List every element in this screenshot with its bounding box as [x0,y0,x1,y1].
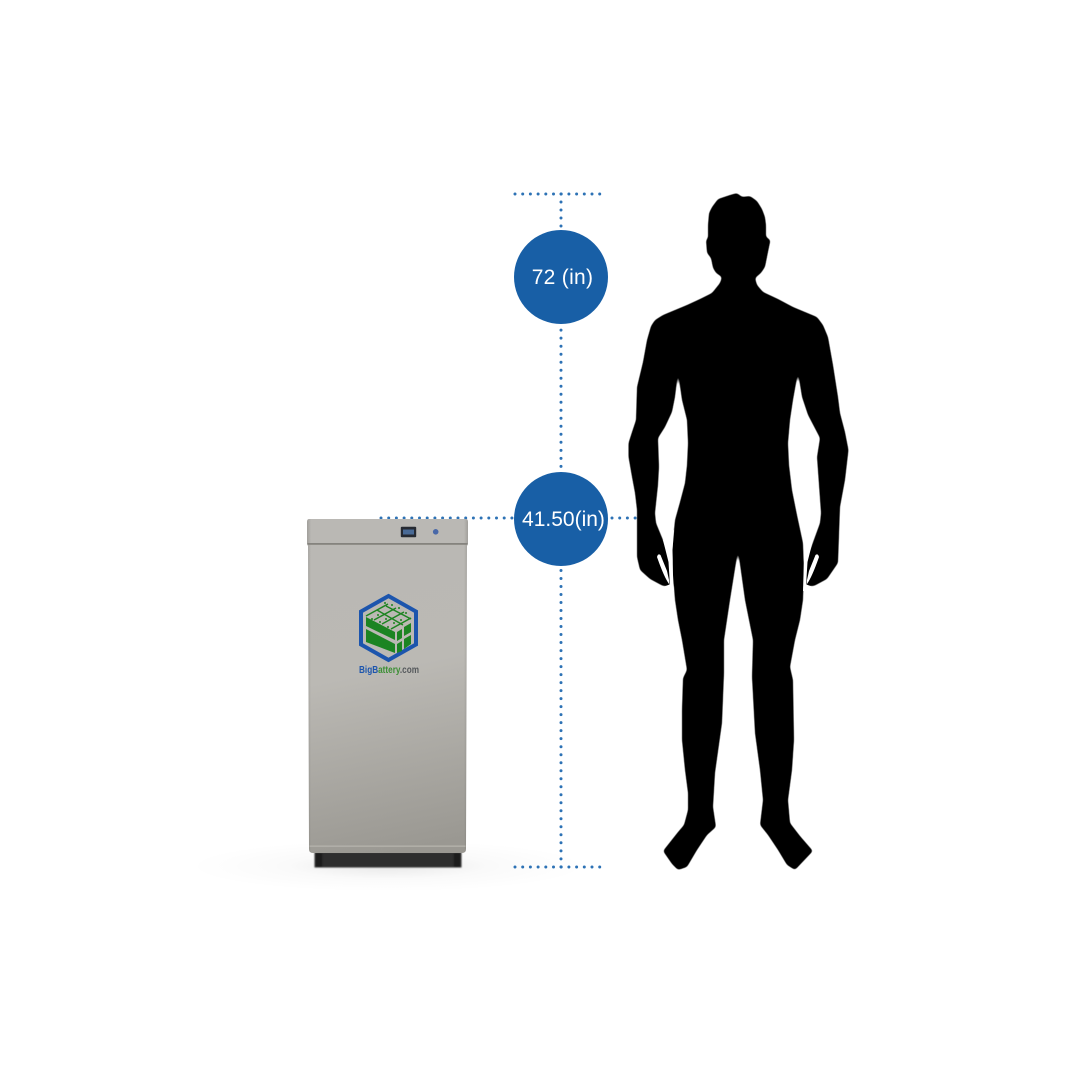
floor shadow [188,840,588,892]
left gap between hand and torso [660,530,674,591]
logo wordmark: BigBattery.com [359,665,419,676]
body outline [628,193,848,870]
digital display [401,527,416,537]
battery cabinet [307,519,468,868]
dotted measurement lines [381,194,636,868]
logo cell dots [371,602,407,628]
cabinet base and wheels [314,852,462,868]
height marker: 41.50 in [514,472,608,566]
BigBattery logo [359,596,419,676]
logo battery cube [366,617,411,653]
height marker: 41.50 in: 41.50(in) [522,508,605,531]
logo top face grid [366,604,411,629]
logo hexagon [361,596,416,660]
left hand finger gap [657,554,669,584]
height marker: 72 in: 72 (in) [532,266,593,289]
human silhouette [628,193,848,870]
height marker: 72 in [514,230,608,324]
power button [433,529,439,535]
cabinet body [307,519,468,853]
right hand finger gap [807,554,819,584]
right gap between hand and torso [802,530,816,591]
